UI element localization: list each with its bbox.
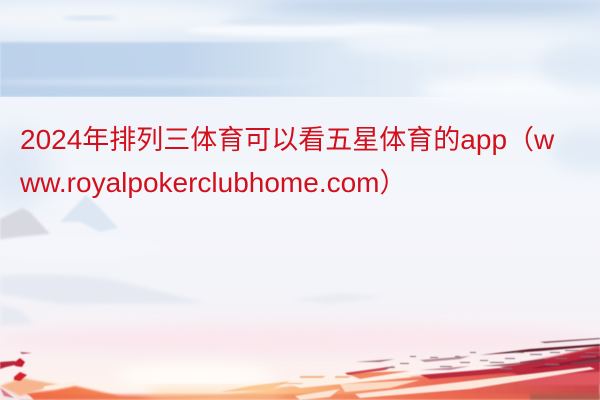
title: 2024年排列三体育可以看五星体育的app（w (20, 124, 554, 155)
ink splatter: red blots (0, 352, 32, 398)
brush strokes: dark red streaks and speckle (280, 338, 600, 384)
title: ww.royalpokerclubhome.com） (20, 166, 406, 198)
sky: blue cloud band (0, 0, 600, 210)
sunset glow base (0, 345, 600, 400)
title (20, 124, 554, 198)
distant haze ridges (0, 275, 600, 354)
brush strokes: white and orange (42, 367, 595, 400)
mountains (0, 195, 160, 260)
